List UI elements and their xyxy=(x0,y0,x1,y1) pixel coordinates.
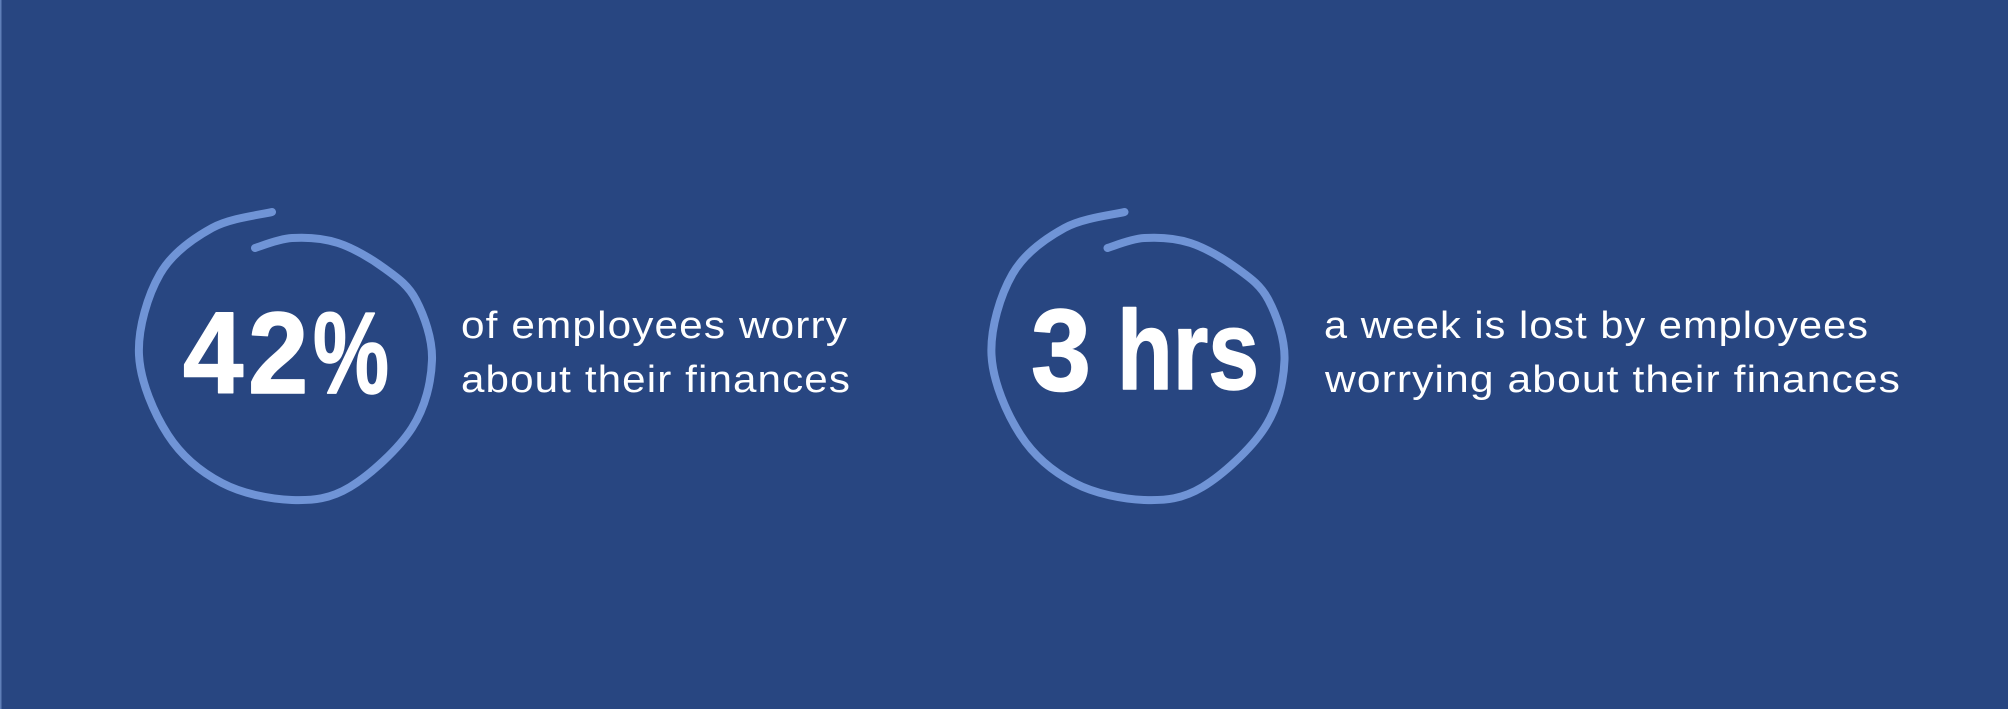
icon: hand-drawn circle around 3 hrs xyxy=(991,212,1285,500)
big number: 3 hrs: 3 xyxy=(1031,285,1091,415)
text block: 42% description: of employees worry xyxy=(461,305,848,347)
big number: 42% xyxy=(183,288,389,418)
text block: 3 hrs description xyxy=(1324,305,1901,401)
text block: 42% description: about their finances xyxy=(461,359,851,401)
icon: hand-drawn circle around 42% xyxy=(139,212,432,500)
big number: 42%: 42 xyxy=(183,288,313,418)
big number: 3 hrs: hrs xyxy=(1117,288,1259,413)
panel: 42% statistic xyxy=(139,212,851,500)
panel: 3 hrs statistic xyxy=(991,212,1901,500)
text block: 3 hrs description: a week is lost by employees xyxy=(1324,305,1869,347)
big number: 3 hrs xyxy=(1031,285,1259,415)
text block: 42% description xyxy=(461,305,851,401)
big number: 42%: % xyxy=(313,288,389,418)
text block: 3 hrs description: worrying about their finances xyxy=(1324,359,1901,401)
